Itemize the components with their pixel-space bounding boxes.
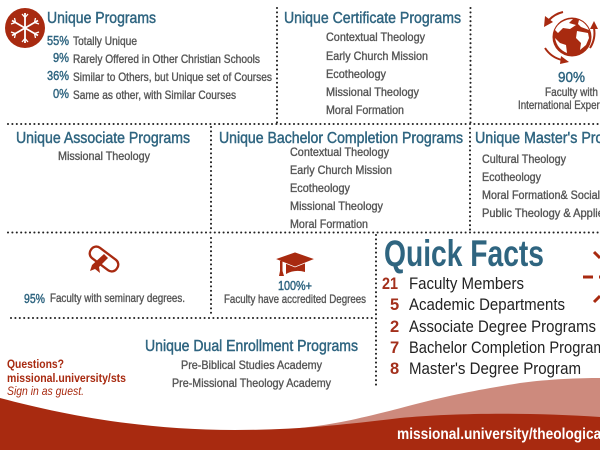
- certificate list: Contextual Theology: [326, 30, 425, 44]
- master's list: Cultural Theology: [482, 152, 566, 166]
- stat label: Faculty have accredited Degrees: [224, 292, 366, 306]
- icon: red sunburst fragment: [583, 252, 600, 302]
- panel: unique programs: [5, 8, 272, 102]
- certificate list: Missional Theology: [326, 85, 419, 99]
- footer wave: [0, 378, 600, 450]
- panel: quick facts: [382, 233, 600, 378]
- facts list: 5: [390, 296, 399, 314]
- panel: international faculty: [518, 12, 600, 112]
- facts list: 7: [390, 339, 399, 357]
- icon: graduation cap: [275, 252, 315, 276]
- facts list: Academic Departments: [409, 296, 565, 314]
- certificate list: Early Church Mission: [326, 49, 428, 63]
- bachelor list: Moral Formation: [290, 217, 368, 231]
- certificate list: [326, 30, 428, 117]
- bachelor list: Contextual Theology: [290, 145, 389, 159]
- panel: seminary degrees: [24, 244, 185, 306]
- master's list: [482, 152, 600, 220]
- stat: 90%: [558, 69, 585, 86]
- bachelor list: Ecotheology: [290, 181, 350, 195]
- uniqueness list: [47, 33, 272, 102]
- heading: Unique Bachelor Completion Programs: [219, 130, 463, 147]
- heading: Quick Facts: [384, 233, 544, 274]
- heading: Unique Certificate Programs: [284, 10, 461, 27]
- stat label: [518, 85, 600, 112]
- certificate list: Ecotheology: [326, 67, 386, 81]
- panel: dual enrollment programs: [145, 338, 358, 390]
- associate list: Missional Theology: [58, 149, 150, 163]
- bachelor list: Early Church Mission: [290, 163, 392, 177]
- uniqueness list: Rarely Offered in Other Christian Schools: [73, 52, 260, 66]
- uniqueness list: Totally Unique: [73, 34, 137, 48]
- facts list: 8: [390, 360, 399, 378]
- facts list: 21: [382, 275, 398, 293]
- panel: master's programs: [475, 130, 600, 220]
- master's list: Ecotheology: [482, 170, 541, 184]
- heading: Unique Associate Programs: [16, 130, 190, 147]
- uniqueness list: 36%: [47, 68, 69, 83]
- questions callout: missional.university/sts: [7, 371, 126, 385]
- uniqueness list: 0%: [53, 86, 69, 101]
- questions callout: [7, 357, 126, 398]
- dual enrollment list: Pre-Biblical Studies Academy: [181, 358, 322, 372]
- panel: certificate programs: [284, 10, 461, 117]
- heading: Unique Dual Enrollment Programs: [145, 338, 358, 355]
- facts list: 2: [390, 318, 399, 336]
- questions callout: Sign in as guest.: [7, 384, 84, 398]
- facts list: Master's Degree Program: [409, 360, 581, 378]
- icon: diploma: [87, 244, 121, 274]
- dual enrollment list: Pre-Missional Theology Academy: [172, 376, 331, 390]
- dual enrollment list: [172, 358, 331, 390]
- uniqueness list: Similar to Others, but Unique set of Courses: [73, 70, 272, 84]
- panel: bachelor completion programs: [219, 130, 463, 231]
- facts list: [382, 275, 600, 378]
- panel: associate programs: [16, 130, 190, 163]
- heading: Unique Programs: [47, 10, 156, 27]
- uniqueness list: 55%: [47, 33, 69, 48]
- uniqueness list: Same as other, with Similar Courses: [73, 88, 236, 102]
- certificate list: Moral Formation: [326, 103, 404, 117]
- icon: snowflake: [5, 8, 45, 48]
- uniqueness list: 9%: [53, 50, 69, 65]
- icon: globe with arrows: [544, 12, 598, 64]
- questions callout: Questions?: [7, 357, 64, 371]
- panel: accredited degrees: [224, 252, 366, 306]
- stat: 100%+: [278, 278, 312, 293]
- stat label: Faculty with seminary degrees.: [50, 291, 185, 305]
- bachelor list: [290, 145, 392, 231]
- facts list: Faculty Members: [409, 275, 524, 293]
- stat: 95%: [24, 291, 45, 306]
- bachelor list: Missional Theology: [290, 199, 383, 213]
